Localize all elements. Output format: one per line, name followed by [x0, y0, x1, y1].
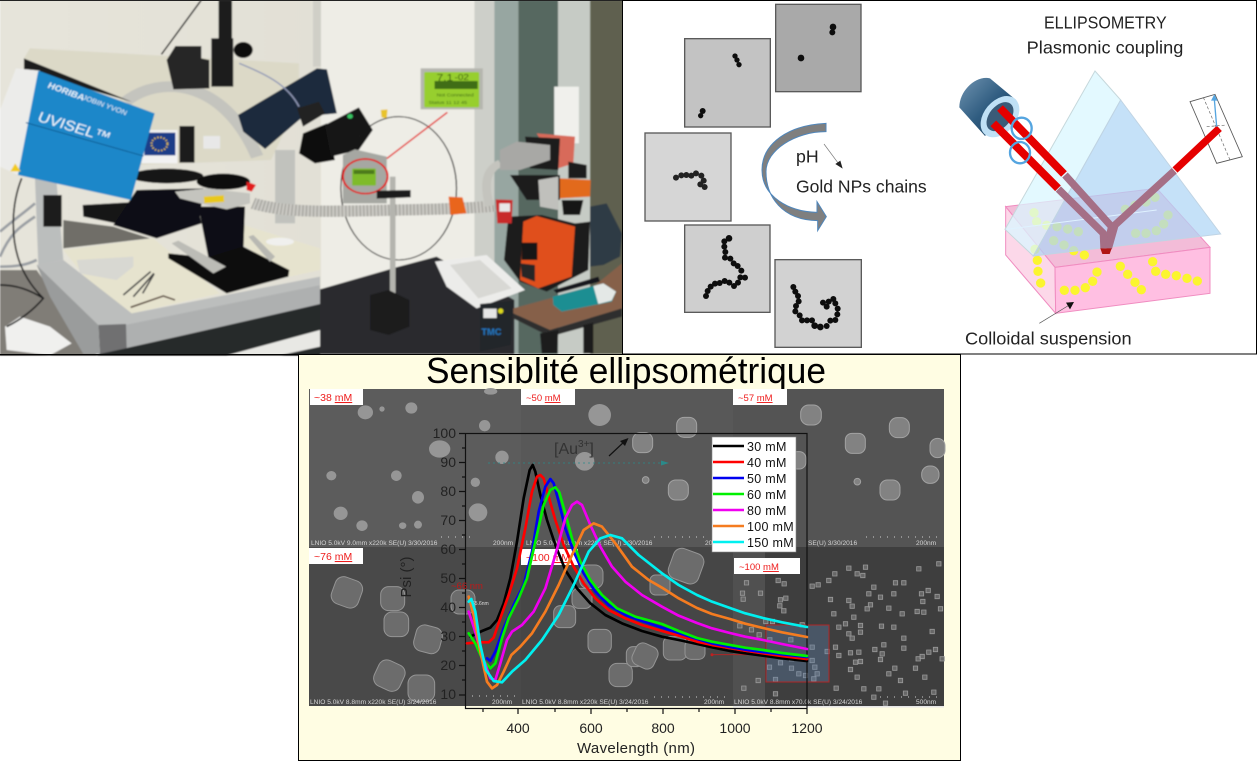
- y axis title: Psi (°): [398, 556, 415, 598]
- white control pad: [435, 255, 525, 308]
- SEM concentration labels: ~57 mM: [738, 393, 773, 404]
- y axis numbers: 20: [440, 657, 456, 673]
- heading: ELLIPSOMETRY: ELLIPSOMETRY: [1044, 12, 1167, 32]
- SEM footer text: 200nm: [492, 699, 513, 706]
- legend: 40 mM: [747, 456, 787, 470]
- TEM image 2: [685, 39, 770, 127]
- curve: 60 mM: [469, 487, 807, 668]
- legend: 50 mM: [747, 472, 787, 486]
- y axis numbers: 30: [440, 628, 456, 644]
- SEM particles, upper left: [326, 388, 611, 531]
- silver frame: [37, 260, 320, 355]
- post and dark gap behind stage: [35, 178, 150, 265]
- red reference arrow: [710, 653, 766, 656]
- TEM image stack and pH arrow: [645, 4, 927, 347]
- vacuum gauge controller: [343, 149, 388, 203]
- light source cylinder: [959, 78, 1027, 145]
- optical table: [96, 257, 514, 354]
- EU sticker: [142, 126, 220, 163]
- y axis numbers: [433, 425, 456, 702]
- curve: 100 mM: [469, 523, 807, 688]
- measuring spot: [1100, 248, 1112, 254]
- gauge display enlargement: Not Connected: [437, 93, 474, 98]
- legend: 30 mM: [747, 440, 787, 454]
- dashed teal reference line: [488, 460, 669, 466]
- SEM concentration labels: [309, 389, 800, 574]
- SEM footer text: 200nm: [916, 540, 937, 547]
- curve: 30 mM: [470, 465, 807, 661]
- support rod and foot: [370, 177, 411, 335]
- y axis numbers: 50: [440, 570, 456, 586]
- x axis numbers: 400: [506, 720, 530, 736]
- annotation: Au3+ concentration arrow: [Au: [554, 441, 578, 458]
- SEM footer text: LNIO 5.0kV 8.8mm x70.0k SE(U) 3/24/2016: [734, 699, 863, 706]
- TEM image 4: [685, 225, 770, 312]
- polarisation rings: [1010, 118, 1032, 163]
- glass prism: [1005, 71, 1221, 256]
- tweezers and hex key: [123, 272, 175, 307]
- x axis numbers: 1200: [791, 720, 823, 736]
- goniometer arc: [24, 48, 299, 165]
- label: approx 66 nm: ~66 nm: [451, 581, 483, 592]
- SEM footer text: SE(U) 3/30/2016: [808, 540, 857, 547]
- SEM footer text: 200nm: [705, 540, 726, 547]
- light beams inside prism: [1058, 171, 1174, 248]
- blue UVISEL spectrometer box: [0, 58, 155, 200]
- panel: laboratory photo of ellipsometer: [0, 0, 625, 356]
- title: Sensiblité ellipsométrique: [426, 350, 826, 391]
- vertical tower and camera: [161, 0, 253, 89]
- SEM small nanocubes, 70k magnification: [738, 562, 944, 705]
- SEM footer text: [310, 540, 937, 706]
- gauge display enlargement: 7.1: [437, 73, 453, 84]
- curve: 80 mM: [469, 502, 807, 680]
- SEM concentration labels: ~100 mM: [739, 562, 779, 573]
- SEM footer text: 500nm: [916, 699, 937, 706]
- red callout line: [387, 112, 447, 159]
- x axis numbers: 1000: [719, 720, 751, 736]
- y axis numbers: 80: [440, 483, 456, 499]
- y axis numbers: 100: [433, 425, 456, 441]
- thin black cable loop: [341, 117, 457, 260]
- annotation: Au3+ concentration arrow: ]: [589, 441, 594, 458]
- legend: 100 mM: [747, 520, 794, 534]
- label: Colloidal suspension: Colloidal suspension: [965, 328, 1132, 348]
- red region of interest box: [766, 625, 829, 682]
- SEM footer text: LNIO 5.0kV 8.8mm x220k SE(U) 3/30/2016: [526, 540, 653, 547]
- vacuum pump and side table: [435, 133, 622, 353]
- SEM concentration labels: ~76 mM: [314, 551, 352, 563]
- SEM concentration labels: ~100 mM: [526, 552, 570, 564]
- cream base plates: [63, 225, 320, 313]
- side table: [513, 263, 622, 353]
- gauge display enlargement: Status 11 12 45: [429, 100, 467, 106]
- SEM footer text: 200nm: [704, 699, 725, 706]
- label: approx 66 nm: 65.6nm: [472, 601, 489, 607]
- label: pH: pH: [796, 146, 819, 166]
- TEM image 1: [776, 4, 861, 92]
- pink colloidal cell: [1006, 188, 1210, 313]
- analyser: [1175, 94, 1242, 170]
- gauge display enlargement: -02: [455, 73, 469, 82]
- label: approx 66 nm: [451, 581, 489, 607]
- panel: ellipsometric sensitivity: [298, 350, 960, 760]
- gold nanoparticle chains: [1029, 193, 1202, 295]
- instrument base and sample stage: [0, 169, 320, 355]
- x axis numbers: [506, 720, 823, 736]
- black stage: [83, 169, 289, 293]
- medicine box: [553, 283, 616, 312]
- SEM particles, lower left: [329, 565, 643, 702]
- gauge display enlargement: [421, 68, 483, 109]
- x axis numbers: 600: [579, 720, 603, 736]
- legend: 150 mM: [747, 536, 794, 550]
- y axis numbers: 40: [440, 599, 456, 615]
- spectra curves: [467, 465, 807, 688]
- valve assembly: [496, 133, 591, 223]
- x axis numbers: 800: [651, 720, 675, 736]
- TEM image 3: [645, 133, 731, 221]
- x axis title: Wavelength (nm): [577, 740, 695, 757]
- SEM particles, lower middle: [629, 546, 706, 672]
- curve: 50 mM: [487, 479, 807, 661]
- blue UVISEL spectrometer box: UVISEL™: [35, 110, 113, 146]
- Psi versus wavelength line chart: [398, 425, 823, 757]
- pump motor and body: [504, 203, 622, 293]
- SEM footer text: LNIO 5.0kV 9.0mm x220k SE(U) 3/30/2016: [311, 540, 438, 547]
- TMC table strip: TMC: [481, 327, 502, 337]
- curved pH arrow: [762, 123, 826, 231]
- y axis numbers: 90: [440, 454, 456, 470]
- panel: gold nanoparticle chains and ellipsometry schematic: [622, 0, 1256, 354]
- SEM concentration labels: ~38 mM: [314, 392, 352, 404]
- annotation: Au3+ concentration arrow: [554, 438, 628, 458]
- y axis numbers: 60: [440, 541, 456, 557]
- legend: [712, 437, 796, 552]
- SEM concentration labels: ~50 mM: [526, 393, 561, 404]
- small decreasing arrow: [824, 144, 843, 169]
- SEM particles, upper right: [633, 405, 945, 500]
- pointer arrow to cell: [1039, 302, 1074, 323]
- curve: 40 mM: [467, 475, 807, 659]
- ellipsometry diagram: [959, 12, 1242, 348]
- flexible vacuum hose: [253, 163, 500, 215]
- SEM footer text: 200nm: [493, 540, 514, 547]
- floor and cables at left: [0, 178, 97, 355]
- legend: 60 mM: [747, 488, 787, 502]
- SEM footer text: LNIO 5.0kV 8.8mm x220k SE(U) 3/24/2016: [522, 699, 649, 706]
- y axis numbers: 70: [440, 512, 456, 528]
- heading: Plasmonic coupling: Plasmonic coupling: [1027, 37, 1183, 57]
- annotation: Au3+ concentration arrow: 3+: [578, 439, 590, 450]
- label: Gold NPs chains: Gold NPs chains: [796, 177, 927, 197]
- TMC table strip: [480, 301, 513, 352]
- blue UVISEL spectrometer box: HORIBA: [46, 81, 87, 102]
- SEM footer text: LNIO 5.0kV 8.8mm x220k SE(U) 3/24/2016: [310, 699, 437, 706]
- legend: 80 mM: [747, 504, 787, 518]
- curve: 150 mM: [469, 535, 807, 682]
- chart axes: [459, 434, 807, 714]
- detector head: [238, 63, 388, 223]
- TEM image 5: [775, 260, 861, 347]
- SEM image mosaic: [309, 388, 945, 708]
- y axis numbers: 10: [440, 686, 456, 702]
- blue UVISEL spectrometer box: JOBIN YVON: [81, 93, 129, 117]
- incident and reflected red beams: [993, 108, 1064, 188]
